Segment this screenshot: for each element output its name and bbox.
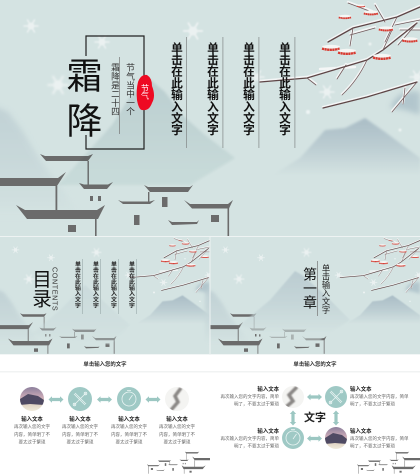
item 1 text: 再次输入您的文字 [14,423,50,430]
mini houses [357,452,420,474]
panel: contents slide [0,237,212,354]
title: 霜降: 霜降 [62,57,102,147]
header band: 单击输入您的文字 [293,360,337,368]
heading: CONTENTS: CONTENTS [50,267,60,311]
panel: cycle slide [210,355,420,474]
vertical text column 3 [242,37,259,148]
contents item 3: 单击在此输入文字 [110,260,116,308]
item 3 text: 输入文本 [118,415,140,423]
text top right: 输入文本 [350,385,372,393]
arrow 3 [146,396,160,403]
mountain centre [240,271,350,340]
text top right [350,385,409,408]
chapter divider [316,261,319,316]
item 1 text [14,415,50,446]
inner divider [118,57,121,134]
contents item 2 [92,259,101,314]
contents item 4 [128,259,137,314]
centre label: 文字 [304,410,326,424]
arrow right [333,410,339,426]
icon: tools [325,386,347,408]
panel: cover slide [0,0,420,237]
icon: timer [117,387,141,411]
text top right: 再次输入您的文字内容，简单 [350,393,409,400]
text top left: 输入文本 [257,385,280,393]
arrow top [307,394,322,400]
contents item 4: 单击在此输入文字 [128,260,134,308]
text bottom right: 再次输入您的文字内容，简单 [350,435,409,442]
subtitle column two: 霜降是二十四 [110,63,120,116]
text bottom left [220,427,280,450]
contents item 2: 单击在此输入文字 [92,260,98,308]
text bottom right: 明了，不要太过于繁琐 [350,442,395,450]
item 2 text: 内容，简单明了不 [62,431,98,438]
text top left: 再次输入您的文字内容，简单 [220,393,279,400]
photo circle: mountains [20,387,44,411]
photo circle: mountains [325,427,347,449]
icon: timer [282,427,304,449]
vertical text column 4 [278,37,295,148]
mountain centre [30,285,130,345]
item 4 text: 要太过于繁琐 [164,438,191,446]
arrow left [290,410,296,426]
photo circle: ink [282,386,304,408]
title frame [86,36,144,149]
vertical text column 3: 单击在此输入文字 [242,41,254,136]
item 2 text: 要太过于繁琐 [66,438,94,446]
arrow 2 [97,396,112,403]
red seal: 节气 [140,84,150,100]
item 3 text: 再次输入您的文字 [111,423,147,430]
chapter heading: 第一章 [302,266,318,309]
item 4 text: 再次输入您的文字 [159,423,195,430]
text top left [220,385,280,408]
text bottom left: 输入文本 [257,427,280,435]
panel: process slide [0,355,210,474]
contents item 3 [110,259,119,314]
item 1 text: 输入文本 [21,415,43,423]
text bottom left: 再次输入您的文字内容，简单 [220,435,279,442]
vertical text column 2: 单击在此输入文字 [206,41,218,136]
vertical text column 1: 单击在此输入文字 [170,41,182,136]
item 3 text: 要太过于繁琐 [116,438,143,446]
contents item 1: 单击在此输入文字 [74,260,80,308]
item 2 text: 输入文本 [69,415,91,423]
subtitle column one: 节气当中一个 [125,63,135,116]
item 1 text: 内容，简单明了不 [14,431,50,438]
vertical text column 4: 单击在此输入文字 [278,41,290,136]
header band: 单击输入您的文字 [83,360,127,368]
item 2 text: 再次输入您的文字 [62,423,98,430]
item 2 text [62,415,98,446]
item 4 text: 输入文本 [166,415,188,423]
item 4 text: 内容，简单明了不 [159,431,195,438]
item 3 text [111,415,147,446]
mountain behind title [58,77,235,185]
heading: 目录: 目录 [28,269,50,308]
contents item 1 [74,259,83,314]
arrow bottom [307,435,322,442]
text bottom right: 输入文本 [350,427,372,435]
item 1 text: 要太过于繁琐 [18,438,46,446]
arrow 1 [48,396,64,403]
item 3 text: 内容，简单明了不 [111,431,147,438]
text bottom right [350,427,409,450]
icon: tools [68,387,92,411]
item 4 text [159,415,195,446]
slide dividers [0,236,420,355]
chapter subtitle: 单击输入文字 [321,263,331,314]
text top left: 明了，不要太过于繁琐 [234,400,279,408]
photo circle: ink [165,387,189,411]
vertical text column 1 [170,37,187,148]
red seal [137,75,154,110]
vertical text column 2 [206,37,223,148]
panel: chapter slide [205,237,420,354]
text bottom left: 明了，不要太过于繁琐 [234,442,279,450]
mini houses [147,452,210,474]
text top right: 明了，不要太过于繁琐 [350,400,395,408]
